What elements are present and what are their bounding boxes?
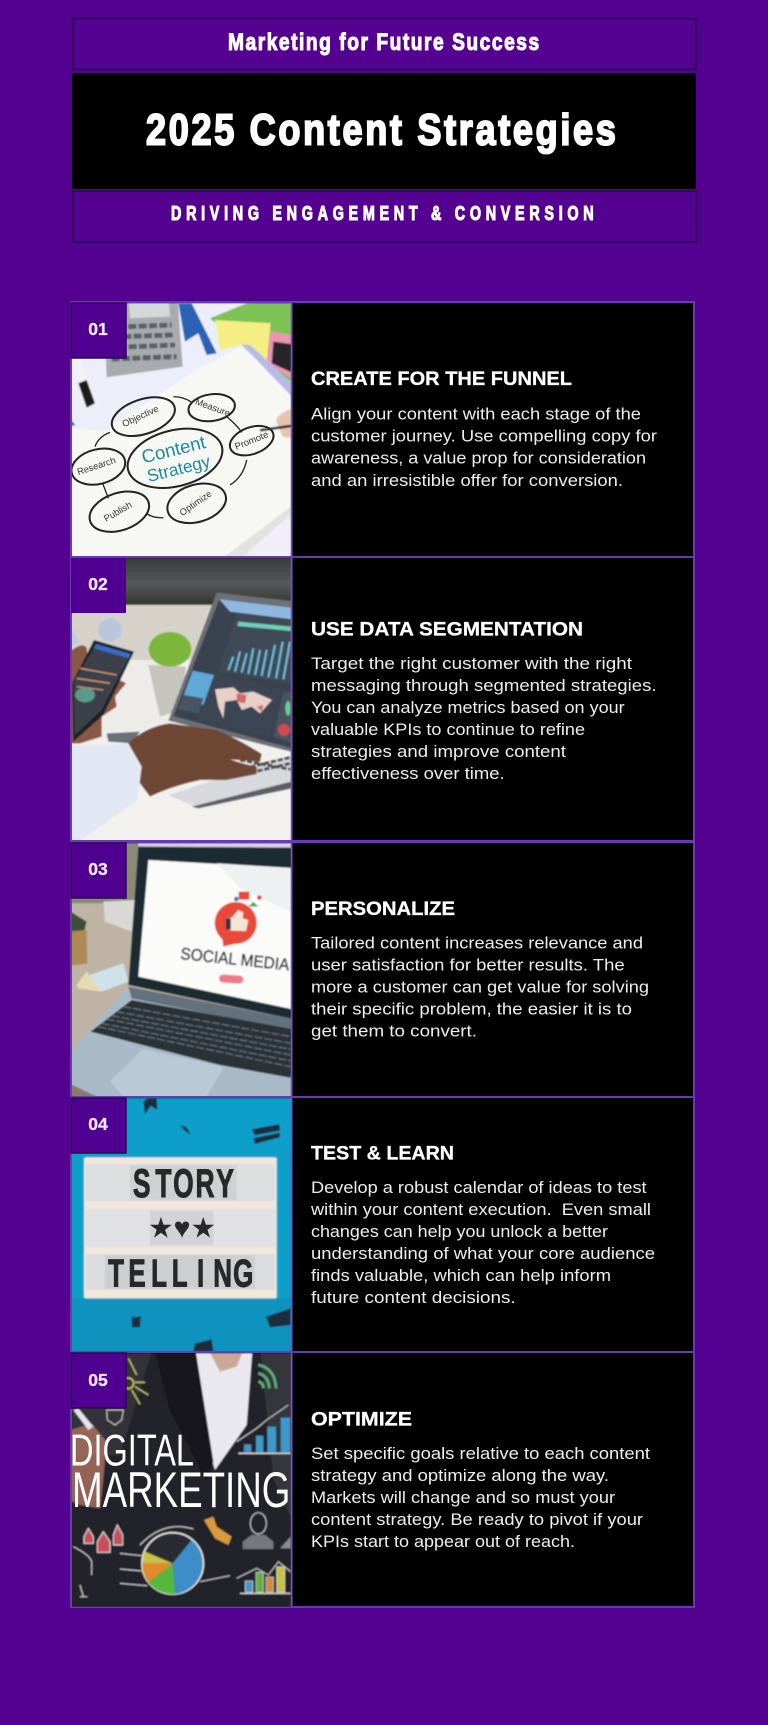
text block 02: You can analyze metrics based on your [311, 699, 625, 717]
text block 03: more a customer can get value for solving [311, 979, 649, 997]
number badge 02: 02 [88, 574, 108, 594]
text block 03: their specific problem, the easier it is to [311, 1001, 632, 1019]
photo: content strategy notebook: Measure [194, 397, 231, 418]
photo: laptop and phone analytics dashboard [72, 558, 291, 840]
photo: businessperson with digital marketing chalk drawings [70, 1353, 291, 1607]
number badge 03 [71, 843, 126, 898]
number badge 04 [71, 1098, 126, 1153]
text block 02: effectiveness over time. [311, 765, 505, 783]
panel: 04 test and learn [65, 1092, 694, 1358]
photo: storytelling lightbox on blue background: STORY [133, 1162, 234, 1206]
text block 04: Develop a robust calendar of ideas to test [311, 1179, 647, 1197]
number badge 01 [71, 303, 126, 358]
title band: 2025 Content Strategies [72, 73, 696, 189]
text block 01: CREATE FOR THE FUNNEL [311, 369, 572, 390]
number badge 04: 04 [88, 1114, 108, 1134]
subtitle banner: Driving Engagement and Conversion: DRIVING ENGAGEMENT & CONVERSION [171, 202, 594, 225]
text block 05 [311, 1410, 650, 1551]
photo: storytelling lightbox on blue background: ★♥★ [148, 1212, 216, 1244]
photo: content strategy notebook: Objective [121, 404, 160, 429]
subtitle banner: Driving Engagement and Conversion [73, 191, 696, 242]
photo: content strategy notebook: Publish [102, 500, 134, 524]
photo: content strategy notebook: Research [76, 455, 117, 477]
title band: 2025 Content Strategies: 2025 Content Strategies [146, 105, 616, 154]
photo: laptop with social media screen [72, 843, 291, 1096]
panel: 01 create for the funnel [65, 297, 694, 563]
number badge 03: 03 [88, 859, 108, 879]
text block 01: Align your content with each stage of the [311, 405, 641, 423]
text block 02: Target the right customer with the right [311, 655, 632, 673]
text block 05: Markets will change and so must your [311, 1489, 616, 1507]
text block 05: KPIs start to appear out of reach. [311, 1533, 575, 1551]
text block 02: messaging through segmented strategies. [311, 677, 656, 695]
text block 04: changes can help you unlock a better [311, 1223, 609, 1241]
photo: storytelling lightbox on blue background: TELLING [108, 1252, 253, 1296]
text block 03: get them to convert. [311, 1023, 477, 1041]
text block 03: PERSONALIZE [311, 899, 455, 920]
top banner: Marketing for Future Success: Marketing for Future Success [228, 28, 539, 56]
number badge 01: 01 [88, 319, 108, 339]
photo: content strategy notebook: Optimize [178, 489, 214, 518]
photo: businessperson with digital marketing chalk drawings: DIGITAL [70, 1427, 194, 1476]
photo: content strategy notebook: Strategy [145, 451, 213, 486]
text block 01: customer journey. Use compelling copy for [311, 428, 658, 446]
top banner: Marketing for Future Success [73, 18, 696, 70]
text block 04: finds valuable, which can help inform [311, 1267, 611, 1285]
number badge 02 [71, 558, 126, 613]
panel: 03 personalize [65, 837, 694, 1103]
text block 02: strategies and improve content [311, 743, 566, 761]
number badge 05: 05 [88, 1370, 108, 1390]
text block 04: future content decisions. [311, 1289, 516, 1307]
text block 05: strategy and optimize along the way. [311, 1467, 609, 1485]
photo: laptop with social media screen: SOCIAL MEDIA [180, 944, 291, 974]
text block 04: TEST & LEARN [311, 1143, 454, 1164]
text block 01: and an irresistible offer for conversion. [311, 472, 623, 490]
photo: content strategy notebook: Promote [233, 429, 270, 452]
text block 03: user satisfaction for better results. The [311, 957, 625, 975]
text block 02 [311, 620, 656, 783]
text block 05: content strategy. Be ready to pivot if your [311, 1511, 644, 1529]
text block 04: within your content execution. Even small [310, 1201, 651, 1219]
number badge 05 [71, 1353, 126, 1408]
text block 05: Set specific goals relative to each content [311, 1445, 650, 1463]
photo: content strategy notebook [72, 303, 291, 556]
photo: storytelling lightbox on blue background [72, 1098, 291, 1351]
text block 01 [311, 369, 658, 490]
photo: content strategy notebook: Content [139, 431, 208, 467]
text block 01: awareness, a value prop for consideration [311, 450, 646, 468]
text block 05: OPTIMIZE [311, 1410, 412, 1431]
text block 02: valuable KPIs to continue to refine [311, 721, 585, 739]
text block 02: USE DATA SEGMENTATION [311, 620, 583, 641]
panel: 05 optimize [65, 1347, 694, 1613]
header block [72, 18, 696, 242]
panel: 02 use data segmentation [65, 552, 694, 847]
text block 04: understanding of what your core audience [311, 1245, 655, 1263]
text block 03 [311, 899, 649, 1041]
text block 04 [310, 1143, 655, 1307]
text block 03: Tailored content increases relevance and [311, 935, 643, 953]
